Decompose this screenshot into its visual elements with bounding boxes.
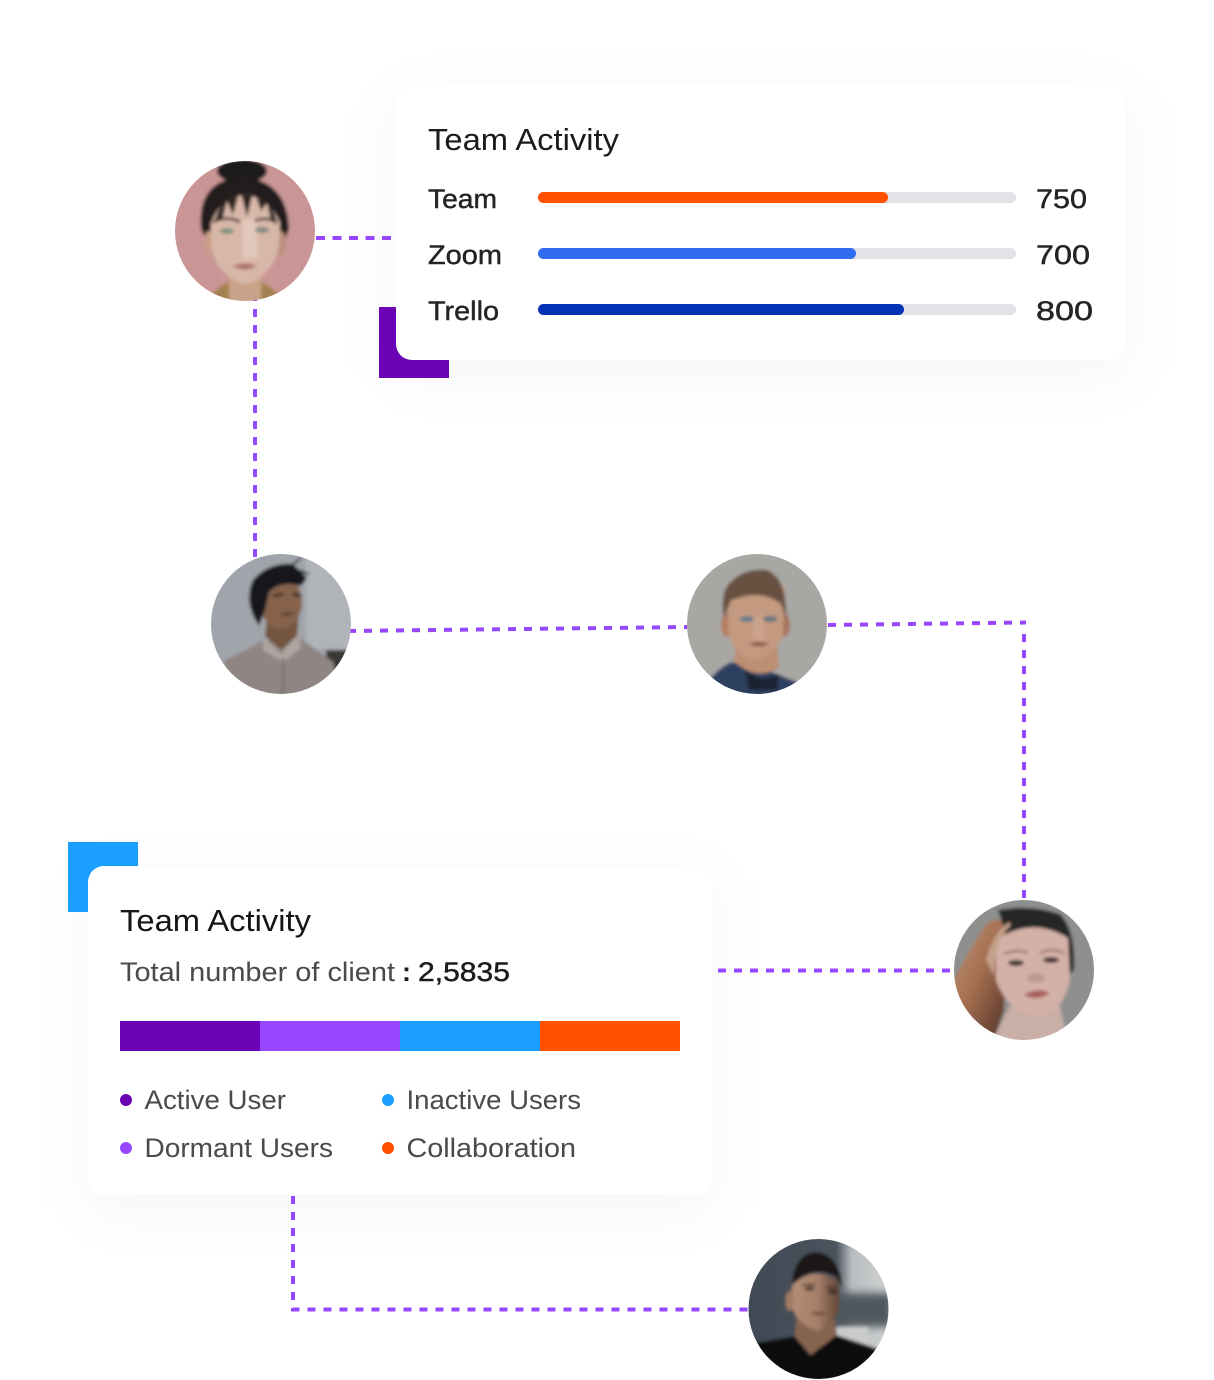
legend: Active User: [144, 1085, 286, 1115]
row: Zoom: Zoom: [428, 240, 502, 270]
connector: avatar 2 to avatar 3: [348, 627, 692, 631]
total clients line: [120, 957, 510, 987]
connector: avatar 3 to avatar 4: [828, 622, 1026, 900]
blue corner accent: [68, 842, 138, 912]
heading: Team Activity: [120, 903, 312, 938]
row: Zoom: [428, 240, 1090, 270]
purple corner accent: [379, 307, 449, 378]
card background: [396, 86, 1126, 360]
heading: Team Activity: [428, 122, 620, 157]
avatar: man with tousled hair: [687, 554, 827, 694]
total clients line: :: [402, 957, 411, 987]
row: Trello: Trello: [428, 296, 499, 326]
legend: [120, 1085, 581, 1163]
row: Trello: 800: [1036, 296, 1093, 326]
legend: Inactive Users: [406, 1085, 581, 1115]
avatar: young man in grey shirt: [211, 554, 351, 694]
connector: avatar 1 to top card: [316, 236, 400, 240]
avatar: woman in black top: [748, 1239, 888, 1379]
panel: team activity bars: [379, 86, 1126, 378]
connector: bottom card to avatar 5: [293, 1196, 750, 1310]
connector: avatar 1 to avatar 2: [253, 293, 257, 557]
row: Team: 750: [1036, 184, 1087, 214]
card background: [88, 866, 712, 1195]
row: Trello: [428, 296, 1093, 326]
connector: bottom card to avatar 4: [718, 968, 952, 972]
avatar: woman with dark bun on pink background: [175, 161, 315, 301]
panel: client totals: [68, 842, 712, 1195]
legend: Dormant Users: [144, 1133, 333, 1163]
row: Team: [428, 184, 1087, 214]
row: Team: Team: [428, 184, 497, 214]
total clients line: Total number of client: [120, 957, 396, 987]
avatar: woman with windblown auburn hair: [954, 900, 1094, 1040]
stacked bar: [120, 1021, 680, 1051]
legend: Collaboration: [406, 1133, 576, 1163]
row: Zoom: 700: [1036, 240, 1090, 270]
card shadows: [88, 100, 1126, 1209]
total clients line: 2,5835: [418, 957, 510, 987]
